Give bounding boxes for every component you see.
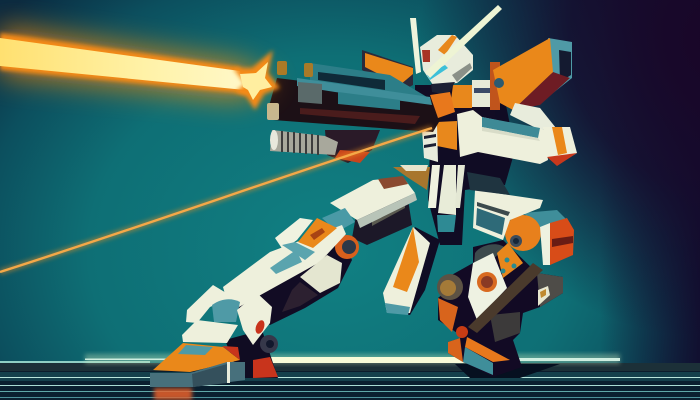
hand: [422, 121, 457, 162]
orange knee: [505, 215, 541, 251]
upper ribbed joint: [474, 244, 505, 265]
neck and collar: [415, 85, 495, 125]
white top piece: [275, 218, 313, 250]
muzzle coil: [270, 130, 338, 155]
head: [420, 35, 473, 95]
white calf: [468, 253, 507, 320]
ankle shadow: [225, 330, 278, 378]
right shoulder: [490, 38, 572, 110]
central torso: [428, 100, 515, 245]
dark underside: [230, 232, 352, 325]
calf armor: [300, 255, 342, 293]
foot: [448, 337, 510, 375]
orange foot: [153, 343, 240, 372]
muzzle flash: [233, 50, 280, 110]
gray hip joint: [437, 274, 463, 300]
red lower gun mount: [325, 130, 380, 163]
front arm: [457, 103, 577, 166]
foot base: [150, 362, 245, 387]
knee joint: [335, 235, 359, 259]
body: [267, 78, 442, 132]
teal band: [282, 242, 315, 260]
knee cap: [540, 218, 574, 265]
rifle: [267, 61, 455, 155]
chest box: [472, 80, 492, 107]
antenna right: [425, 5, 502, 78]
red block: [253, 357, 278, 378]
left white fork: [186, 285, 233, 323]
orange lower shin: [438, 298, 458, 332]
sights: [277, 61, 287, 75]
antenna left: [410, 18, 421, 74]
red stock end: [430, 92, 455, 118]
long white shin: [223, 225, 346, 312]
top rail: [310, 63, 427, 103]
calf port: [477, 272, 497, 292]
red joint: [456, 326, 468, 338]
rear shoulder plate: [362, 50, 413, 92]
red ankle port: [254, 319, 266, 335]
right gray armor: [537, 273, 563, 307]
ankle wheel: [260, 335, 278, 353]
teal piston: [212, 299, 240, 322]
extended shin: [223, 208, 359, 325]
right white fork: [237, 293, 272, 345]
lower orange connector: [497, 243, 523, 278]
big beam: [0, 26, 275, 100]
leg silhouette shadow: [438, 240, 563, 377]
upper body: [362, 5, 572, 125]
left thigh: [330, 165, 430, 245]
back-side orange leg armor: [383, 227, 440, 315]
lower leg ankle and foot: [150, 285, 278, 387]
right leg: [437, 210, 574, 377]
orange plate: [298, 218, 337, 248]
right thigh: [473, 190, 543, 240]
gray lower block: [490, 312, 520, 342]
ankle strut: [468, 263, 543, 333]
teal knee ribs: [523, 210, 570, 227]
knee connector: [322, 208, 355, 232]
receiver panel: [298, 82, 322, 104]
arm cap: [543, 127, 577, 165]
laser beam: thin lower: [0, 128, 432, 272]
floor: [0, 354, 700, 400]
foot plate: [182, 320, 238, 343]
